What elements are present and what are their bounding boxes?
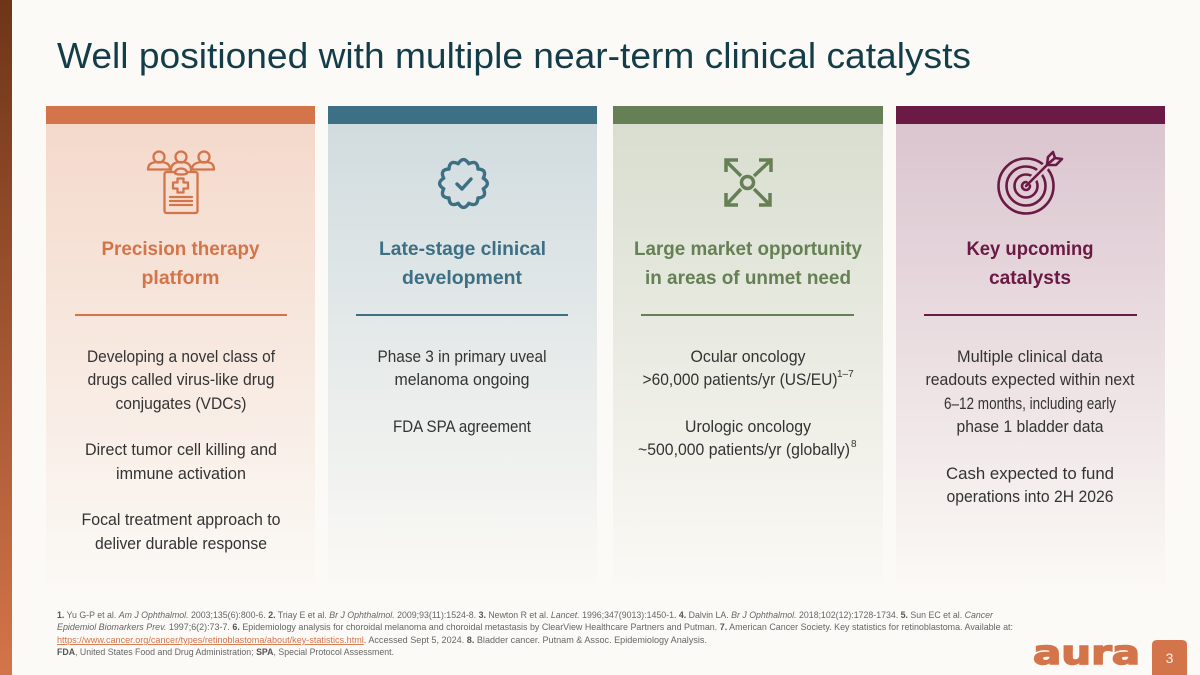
body text: ~500,000 patients/yr (globally) xyxy=(638,441,850,459)
footnotes and references: https://www.cancer.org/cancer/types/retinoblastoma/about/key-statistics.html. Accessed Sept 5, 2024. 8. Bladder cancer. Putnam & Assoc. Epidemiology Analysis. xyxy=(57,635,707,645)
panel: large market opportunity xyxy=(613,106,883,585)
heading xyxy=(102,238,260,289)
heading xyxy=(379,238,546,289)
body text: readouts expected within next xyxy=(926,371,1135,389)
body text xyxy=(378,348,546,436)
left gradient sidebar xyxy=(0,0,12,675)
body text: Urologic oncology xyxy=(685,418,812,436)
body text: phase 1 bladder data xyxy=(956,418,1104,436)
body text: Developing a novel class of xyxy=(87,348,275,366)
body text: >60,000 patients/yr (US/EU) xyxy=(642,371,838,389)
panel: late-stage clinical development xyxy=(328,106,597,585)
body text: deliver durable response xyxy=(95,535,267,553)
footnotes and references xyxy=(57,610,1013,657)
heading xyxy=(634,238,862,289)
panel: precision therapy platform xyxy=(46,106,315,585)
body text: operations into 2H 2026 xyxy=(946,488,1114,506)
heading xyxy=(966,238,1094,289)
body text xyxy=(638,348,857,459)
heading: Large market opportunity xyxy=(634,238,862,260)
body text: conjugates (VDCs) xyxy=(116,395,246,413)
body text: FDA SPA agreement xyxy=(393,418,531,436)
body text: melanoma ongoing xyxy=(394,371,530,389)
heading: in areas of unmet need xyxy=(645,267,851,289)
heading: Precision therapy xyxy=(102,238,260,260)
body text: Phase 3 in primary uveal xyxy=(378,348,546,366)
title: Well positioned with multiple near-term clinical catalysts xyxy=(57,35,971,76)
heading: catalysts xyxy=(989,267,1071,289)
icon: verified badge xyxy=(440,160,487,207)
icon: expanding arrows xyxy=(726,160,771,205)
body text xyxy=(926,348,1135,506)
icon: patients and clipboard xyxy=(148,152,214,213)
footnotes and references: 1. Yu G-P et al. Am J Ophthalmol. 2003;135(6):800-6. 2. Triay E et al. Br J Ophthalmol. 2009;93(11):1524-8. 3. Newton R et al. Lancet. 1996;347(9013):1450-1. 4. Dalvin LA. Br J Ophthalmol. 2018;102(12):1728-1734. 5. Sun EC et al. Cancer xyxy=(57,610,994,620)
body text: Ocular oncology xyxy=(690,348,806,366)
logo: aura: aura xyxy=(1033,633,1140,672)
heading: development xyxy=(402,267,522,289)
body text xyxy=(82,348,280,553)
footnotes and references: Epidemiol Biomarkers Prev. 1997;6(2):73-7. 6. Epidemiology analysis for choroidal melanoma and choroidal metastasis by ClearView Healthcare Partners and Putman. 7. American Cancer Society. Key statistics for retinoblastoma. Available at: xyxy=(57,622,1013,632)
body text: Direct tumor cell killing and xyxy=(85,441,277,459)
body text: Focal treatment approach to xyxy=(82,511,280,529)
heading: Key upcoming xyxy=(966,238,1094,260)
footnotes and references: FDA, United States Food and Drug Administration; SPA, Special Protocol Assessment. xyxy=(57,647,394,657)
panel: key upcoming catalysts xyxy=(896,106,1165,585)
heading: Late-stage clinical xyxy=(379,238,546,260)
body text: drugs called virus-like drug xyxy=(88,371,274,389)
body text: 1–7 xyxy=(837,369,854,380)
body text: 8 xyxy=(851,439,857,450)
body text: 6–12 months, including early xyxy=(944,395,1117,413)
icon: target with arrow xyxy=(998,152,1062,214)
heading: platform xyxy=(142,267,220,289)
body text: Multiple clinical data xyxy=(957,348,1104,366)
body text: immune activation xyxy=(116,465,246,483)
page number: 3 xyxy=(1166,650,1174,666)
body text: Cash expected to fund xyxy=(946,465,1114,483)
page number xyxy=(1152,640,1187,675)
